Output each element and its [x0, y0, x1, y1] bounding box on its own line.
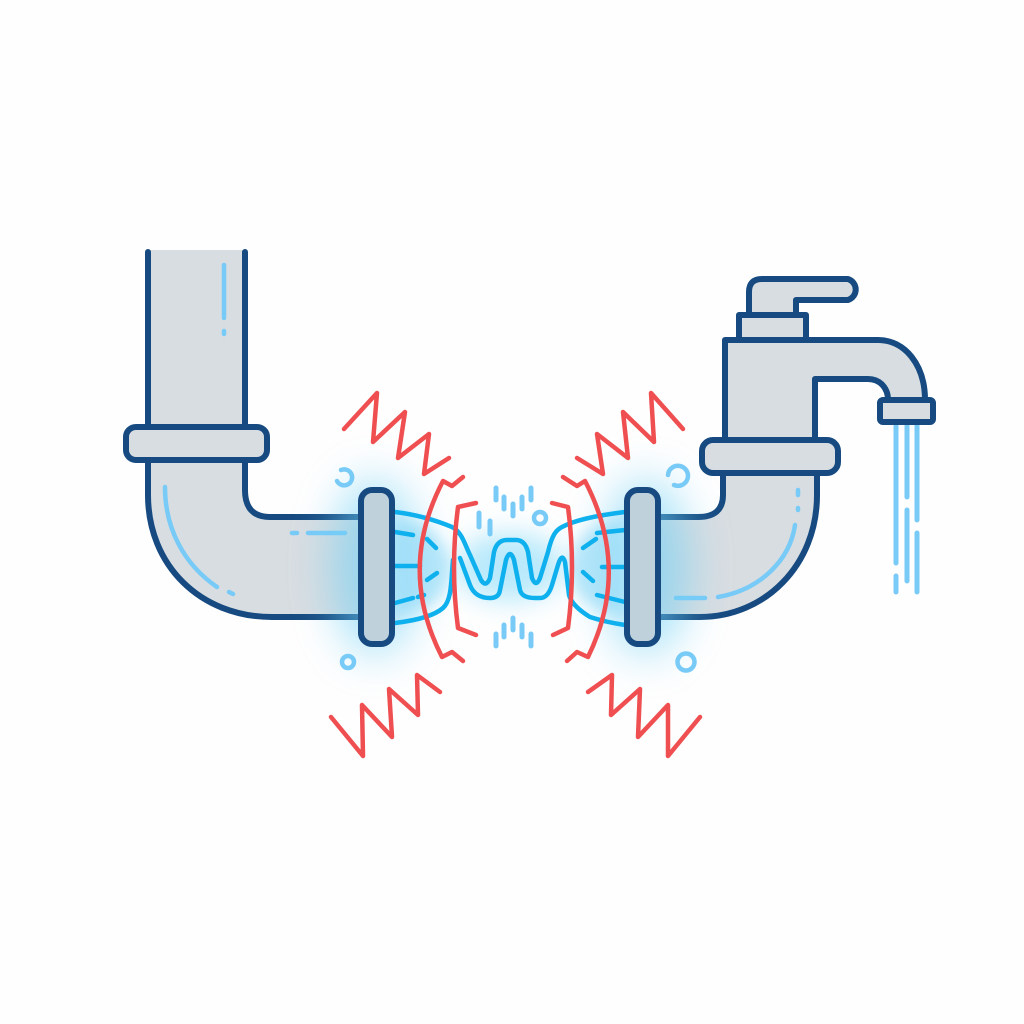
bubble center: [534, 512, 546, 524]
inner left bracket: [454, 503, 476, 635]
faucet cap: [739, 315, 806, 340]
red pressure brackets: [420, 477, 609, 661]
connector upper wave: [395, 512, 625, 584]
hook bubble left: [337, 469, 352, 485]
inner right bracket: [552, 503, 572, 635]
outer right bracket: [563, 477, 609, 661]
water stream from faucet: [896, 426, 917, 592]
blue glow around the joint: [333, 479, 688, 655]
faucet spout body: [725, 340, 925, 442]
squeezed flexible connector: [395, 512, 625, 625]
right elbow highlights: [676, 490, 798, 598]
bottom motion dashes: [496, 618, 531, 646]
right elbow fill: [660, 470, 817, 617]
right pipe and faucet: [660, 279, 933, 617]
connector lower wave: [395, 554, 625, 625]
zigzag top right: [577, 393, 683, 474]
top motion dashes: [479, 488, 531, 534]
red vibration zigzags: [331, 393, 700, 756]
zigzag top left: [344, 393, 449, 474]
faucet handle: [749, 279, 856, 315]
outer left bracket: [420, 477, 463, 661]
left flange: [361, 490, 392, 644]
faucet aerator: [880, 400, 933, 422]
left pipe highlights: [165, 265, 345, 594]
hook bubble right: [668, 466, 688, 486]
right flange: [627, 490, 658, 644]
left drain pipe: [126, 250, 362, 617]
right pipe collar: [702, 440, 838, 473]
right elbow outline: [660, 473, 817, 617]
left pipe collar: [126, 427, 267, 460]
connector inner ripples: [395, 530, 625, 603]
bubble lower right: [678, 654, 694, 670]
zigzag bottom right: [588, 675, 700, 756]
zigzag bottom left: [331, 675, 440, 756]
bubble lower left: [342, 656, 354, 668]
left pipe outline: [148, 252, 362, 617]
left pipe body fill: [148, 250, 362, 617]
blue particles and motion marks: [337, 466, 694, 670]
